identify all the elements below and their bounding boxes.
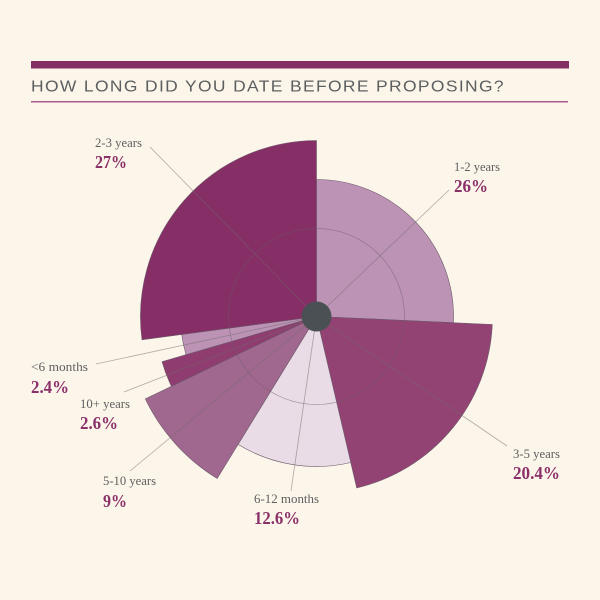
radial chart [96,140,507,491]
wedge: under 6 months [182,316,316,355]
wedge: 10+ years [162,316,316,386]
label: under 6 months [31,359,88,397]
label: under 6 months: 2.4% [31,377,69,397]
label: 2-3 years: 27% [95,152,127,172]
grid circle [228,228,404,404]
title underline [31,101,568,102]
label: 5-10 years [103,473,156,511]
label: 3-5 years: 3-5 years [513,446,560,461]
wedge: 5-10 years [145,316,316,478]
label: 5-10 years: 5-10 years [103,473,156,488]
label: 1-2 years: 1-2 years [454,159,500,174]
label: 10+ years: 2.6% [80,413,118,433]
wedge: 2-3 years [140,140,316,340]
label: 10+ years [80,396,130,433]
label: 1-2 years: 26% [454,176,488,196]
label: 1-2 years [454,159,500,196]
header bar [31,61,569,68]
label: 6-12 months [254,491,319,528]
label: under 6 months: <6 months [31,359,88,374]
label: 2-3 years: 2-3 years [95,135,142,150]
label: 3-5 years [513,446,560,483]
wedge: 6-12 months [238,316,351,466]
label: 6-12 months: 6-12 months [254,491,319,506]
leader lines [96,147,507,491]
label: 5-10 years: 9% [103,491,127,511]
label: 2-3 years [95,135,142,172]
wedge: 3-5 years [316,316,492,488]
label: 6-12 months: 12.6% [254,508,300,528]
label: 10+ years: 10+ years [80,396,130,411]
wedge: 1-2 years [316,180,454,323]
label: 3-5 years: 20.4% [513,463,560,483]
center hub [302,302,332,332]
title: HOW LONG DID YOU DATE BEFORE PROPOSING? [31,78,505,96]
